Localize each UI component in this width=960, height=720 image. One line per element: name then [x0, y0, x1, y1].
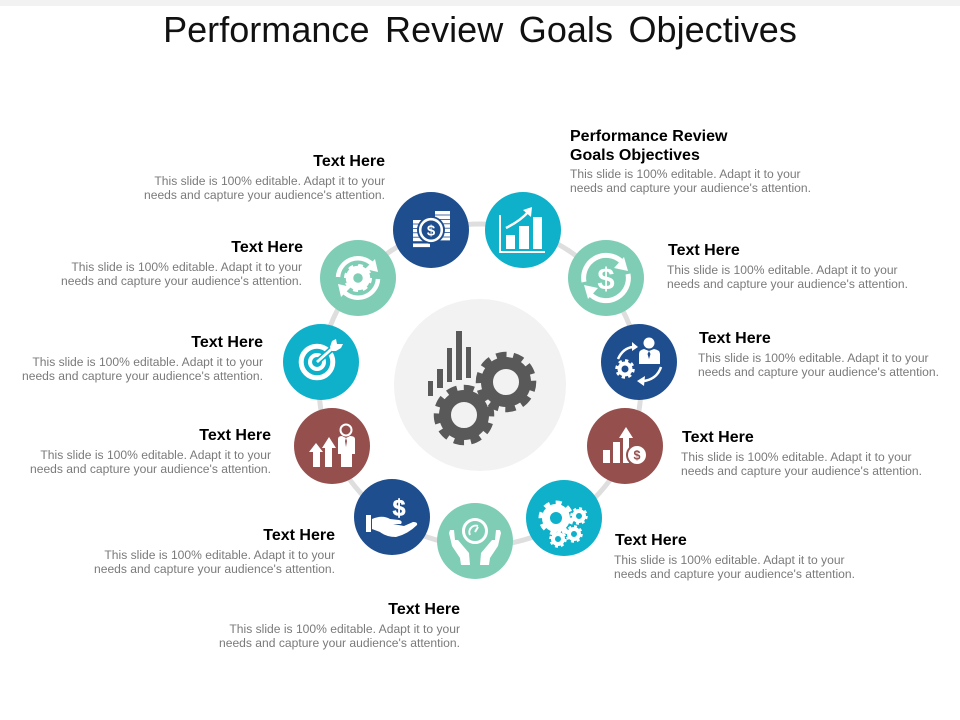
text block: right 4: Text Here [615, 532, 687, 549]
text block: Performance Review Goals Objectives: needs and capture your audience's attention. [570, 181, 811, 195]
text block: left 4: needs and capture your audience's attention. [30, 462, 271, 476]
text block: right 3: This slide is 100% editable. Adapt it to your [681, 450, 912, 464]
text block: right 1: This slide is 100% editable. Adapt it to your [667, 263, 898, 277]
text block: left 3: Text Here [191, 334, 263, 351]
connecting ring [319, 224, 641, 546]
center hub with gears and bars icon [394, 299, 566, 471]
text block: left 3: This slide is 100% editable. Adapt it to your [32, 355, 263, 369]
text block: right 4: needs and capture your audience's attention. [614, 567, 855, 581]
text block: left 3: needs and capture your audience's attention. [22, 369, 263, 383]
text block: left 1 [144, 153, 385, 202]
text block: left 5: needs and capture your audience's attention. [94, 562, 335, 576]
text block: bottom: needs and capture your audience's attention. [219, 636, 460, 650]
text block: right 2: needs and capture your audience's attention. [698, 365, 939, 379]
text block: left 3 [22, 334, 263, 383]
icon: gears on teal circle [526, 480, 602, 556]
text block: left 1: Text Here [313, 153, 385, 170]
icon: hands holding gauge on green circle [437, 503, 513, 579]
text block: left 2: needs and capture your audience's attention. [61, 274, 302, 288]
icon: person with cycle arrows on navy circle [601, 324, 677, 400]
text block: right 4: This slide is 100% editable. Adapt it to your [614, 553, 845, 567]
text block: right 2: Text Here [699, 330, 771, 347]
text block: right 4 [614, 532, 855, 581]
text block: right 2 [698, 330, 939, 379]
text block: left 2: This slide is 100% editable. Adapt it to your [71, 260, 302, 274]
icon: gear cycle on green circle [320, 240, 396, 316]
icon: target on teal circle [283, 324, 359, 400]
icon: hand holding dollar on navy circle [354, 479, 430, 555]
text block: Performance Review Goals Objectives: Goals Objectives [570, 147, 700, 164]
icon: bars, arrow and dollar coin on brown circle: $ [634, 448, 641, 462]
text block: left 5: Text Here [263, 527, 335, 544]
text block: Performance Review Goals Objectives: This slide is 100% editable. Adapt it to your [570, 167, 801, 181]
text block: right 1: needs and capture your audience's attention. [667, 277, 908, 291]
title: Performance Review Goals Objectives [163, 9, 797, 50]
text block: left 5: This slide is 100% editable. Adapt it to your [104, 548, 335, 562]
icon: dollar cycle on green circle [568, 240, 644, 316]
icon: hand holding dollar on navy circle: $ [393, 495, 406, 521]
text block: right 2: This slide is 100% editable. Adapt it to your [698, 351, 929, 365]
text block: left 4 [30, 427, 271, 476]
icon: coins on navy circle: $ [427, 222, 436, 240]
text block: left 1: This slide is 100% editable. Adapt it to your [154, 174, 385, 188]
icon: arrows and person on brown circle [294, 408, 370, 484]
text block: left 4: Text Here [199, 427, 271, 444]
text block: right 3 [681, 429, 922, 478]
icon: coins on navy circle [393, 192, 469, 268]
text block: right 3: needs and capture your audience's attention. [681, 464, 922, 478]
text block: bottom [219, 601, 460, 650]
text block: right 1: Text Here [668, 242, 740, 259]
text block: left 4: This slide is 100% editable. Adapt it to your [40, 448, 271, 462]
text block: bottom: Text Here [388, 601, 460, 618]
icon: rising bar chart on teal circle [485, 192, 561, 268]
text block: Performance Review Goals Objectives: Performance Review [570, 128, 728, 145]
text block: left 5 [94, 527, 335, 576]
icon: dollar cycle on green circle: $ [597, 261, 615, 296]
text block: Performance Review Goals Objectives [570, 128, 811, 195]
icon: bars, arrow and dollar coin on brown circle [587, 408, 663, 484]
text block: right 3: Text Here [682, 429, 754, 446]
text block: right 1 [667, 242, 908, 291]
text block: left 2: Text Here [231, 239, 303, 256]
text block: left 1: needs and capture your audience's attention. [144, 188, 385, 202]
text block: bottom: This slide is 100% editable. Adapt it to your [229, 622, 460, 636]
text block: left 2 [61, 239, 303, 288]
